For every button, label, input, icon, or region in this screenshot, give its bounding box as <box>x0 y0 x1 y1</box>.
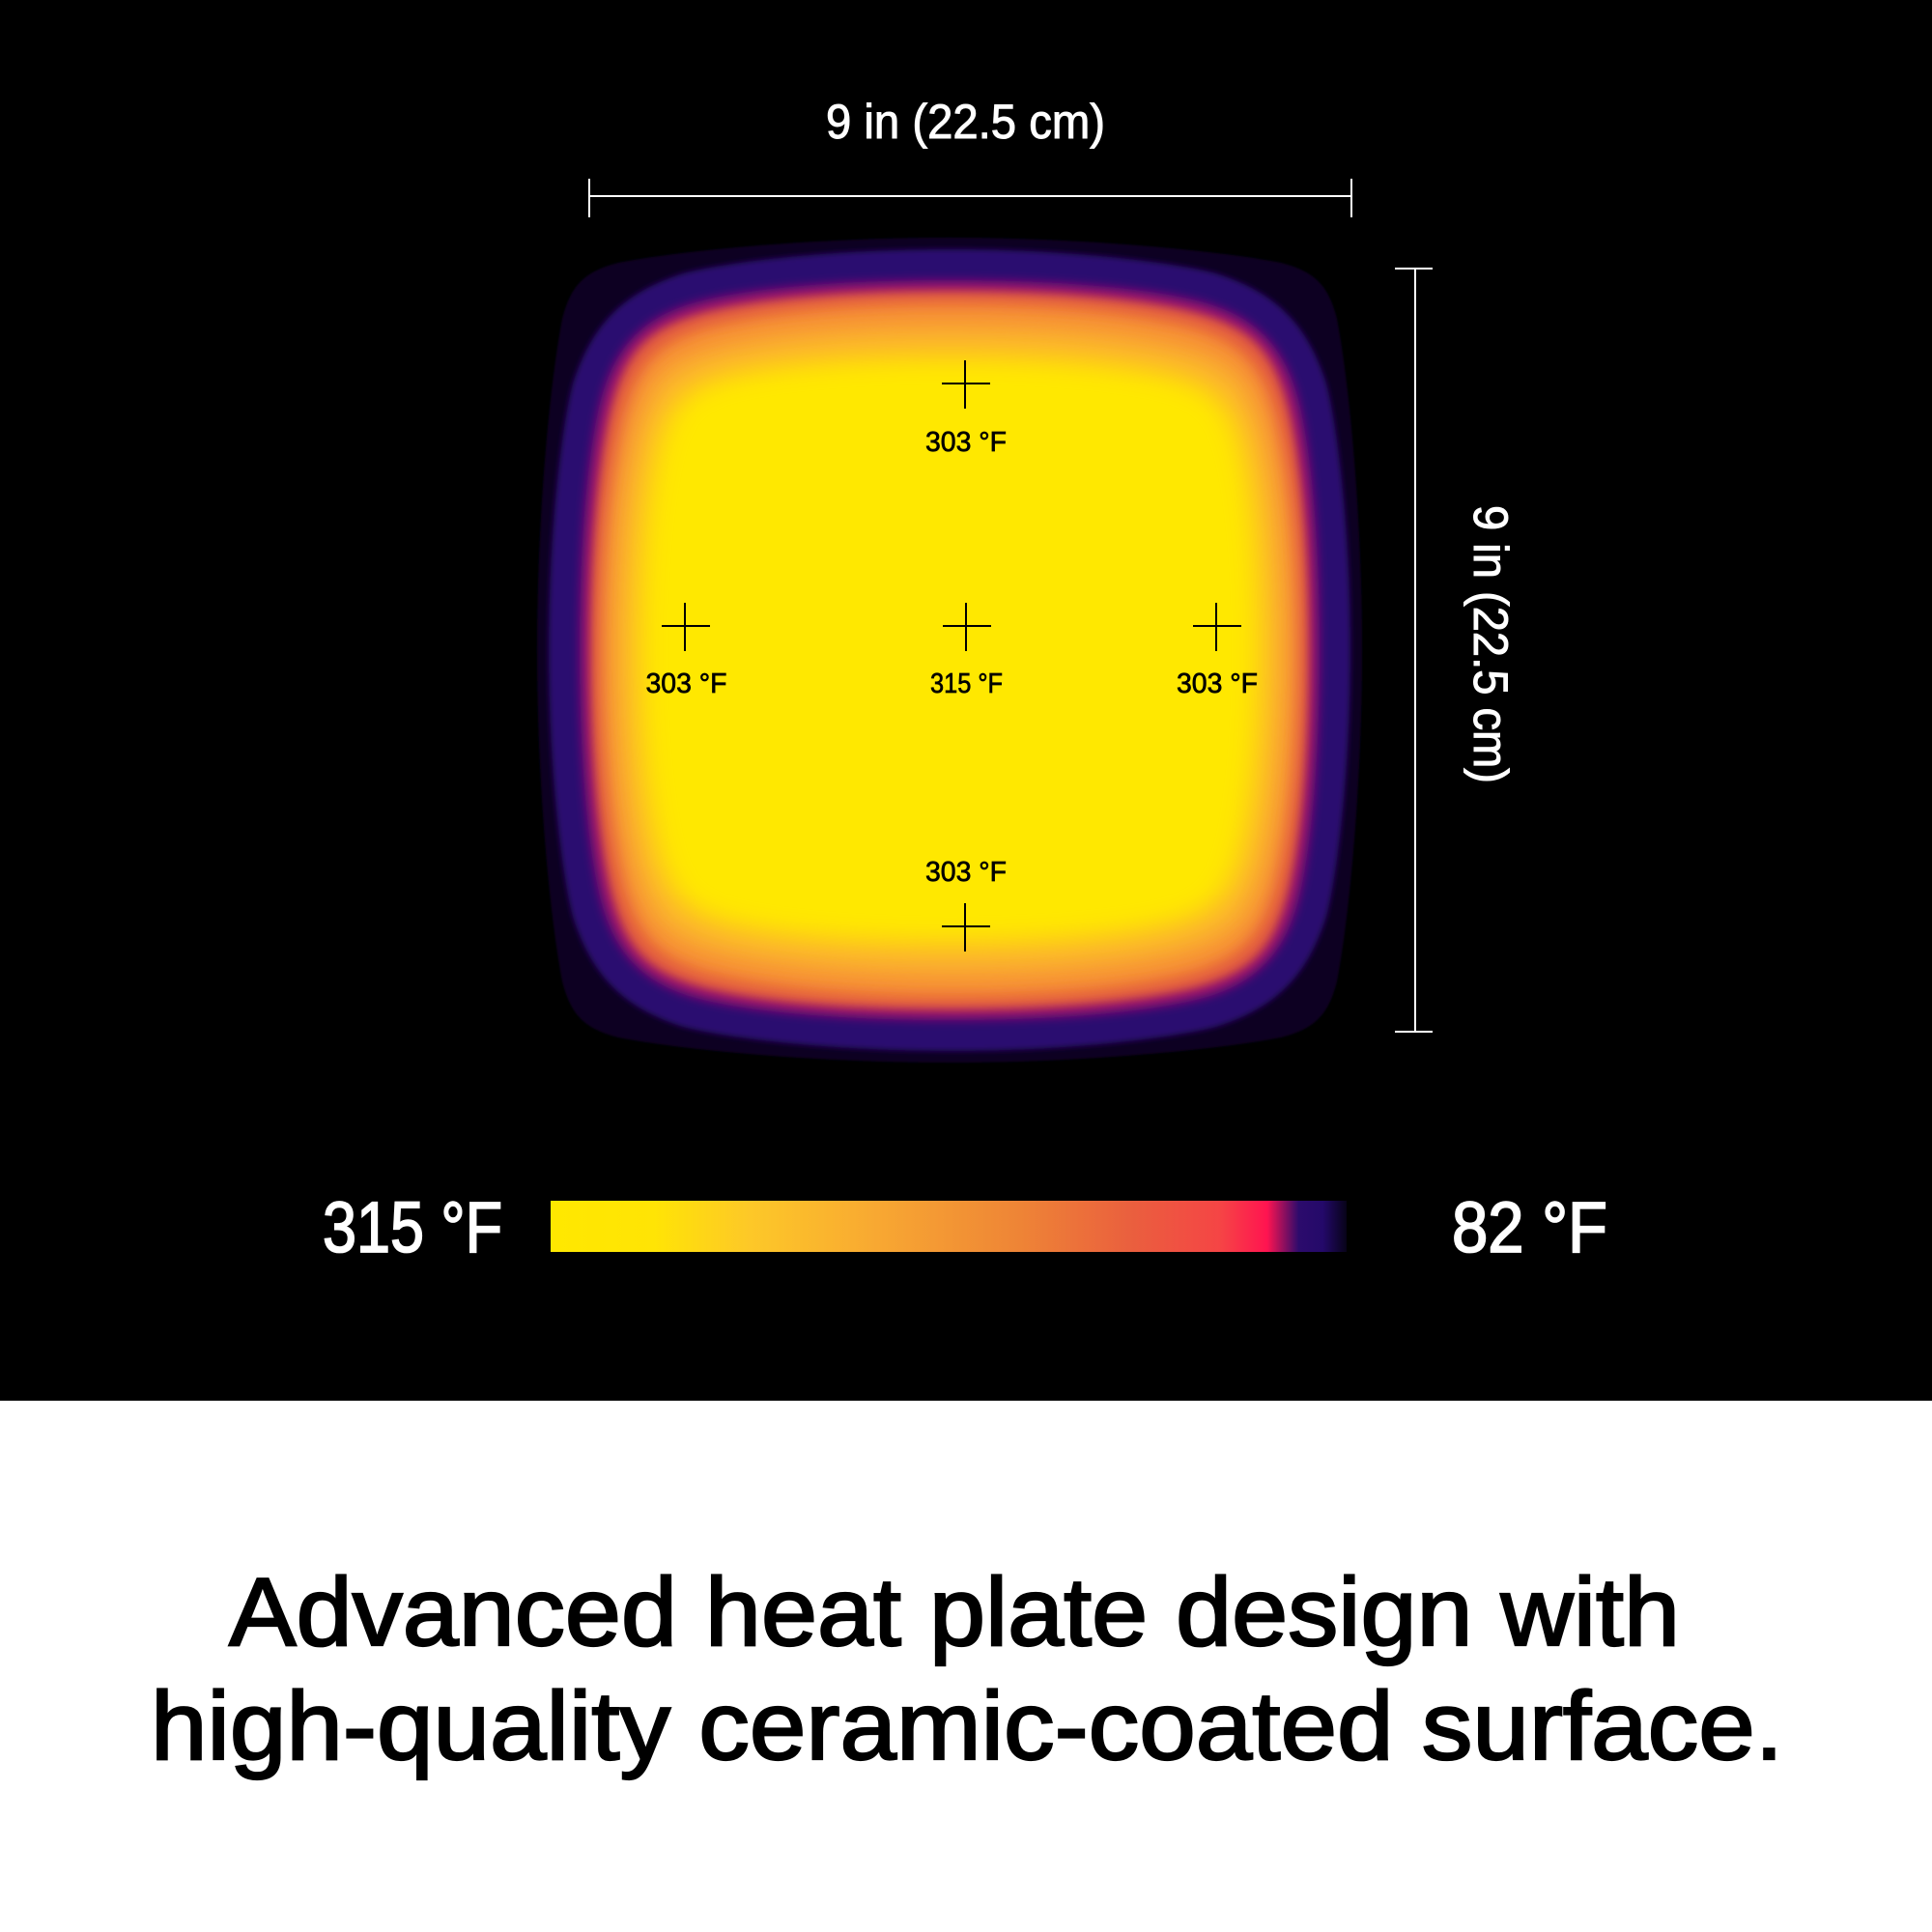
label: left reading: 303 °F <box>645 668 726 699</box>
black upper panel <box>0 0 1932 1401</box>
white lower panel <box>0 1401 1932 1932</box>
height dimension label: 9 in (22.5 cm) <box>1463 505 1518 783</box>
headline <box>151 1558 1783 1780</box>
legend max label: 315 °F <box>323 1187 502 1267</box>
crosshair: left <box>662 603 710 651</box>
label: bottom reading: 303 °F <box>925 857 1007 888</box>
headline: Advanced heat plate design with <box>229 1558 1680 1666</box>
legend color scale bar <box>551 1201 1347 1252</box>
crosshair: top <box>942 360 990 409</box>
crosshair: bottom <box>942 903 990 952</box>
crosshair: right <box>1193 603 1241 651</box>
width dimension label: 9 in (22.5 cm) <box>826 95 1105 149</box>
height dimension line <box>1395 269 1433 1032</box>
label: center reading: 315 °F <box>930 668 1003 699</box>
width dimension line <box>589 179 1351 217</box>
crosshair: center <box>943 603 991 651</box>
headline: high-quality ceramic-coated surface. <box>151 1672 1783 1780</box>
label: top reading: 303 °F <box>925 427 1007 458</box>
heat map <box>537 238 1362 1063</box>
label: right reading: 303 °F <box>1177 668 1258 699</box>
legend min label: 82 °F <box>1452 1187 1607 1267</box>
